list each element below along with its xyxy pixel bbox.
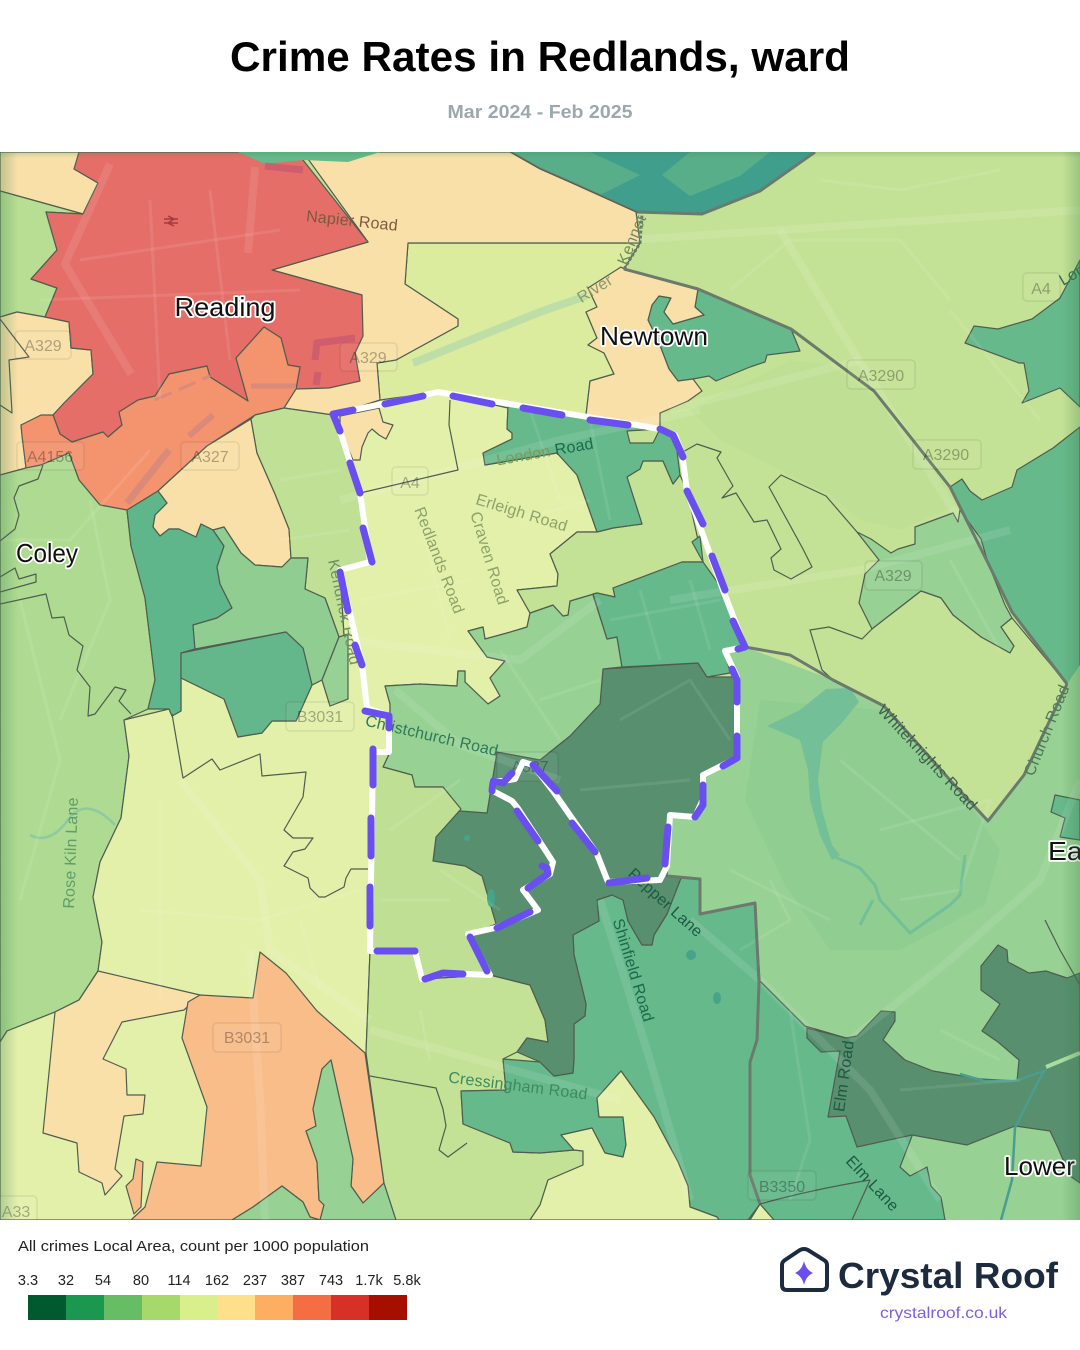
region: east of ward green block	[593, 562, 745, 677]
road number badges: A4	[1031, 281, 1051, 298]
lake in whiteknights park	[767, 688, 859, 860]
thick boundary lines	[624, 215, 1067, 1220]
road name labels: Elm Road	[831, 1039, 858, 1113]
road number badges	[0, 273, 1060, 1225]
region: green block B3031	[181, 632, 312, 737]
legend values: 3.3	[18, 1273, 38, 1289]
river thames area	[510, 152, 815, 214]
place names: Coley	[16, 538, 78, 568]
region: lower left cream	[43, 971, 200, 1195]
region: green triangle	[692, 536, 703, 562]
road name labels: Cressingham Road	[447, 1070, 589, 1103]
roads	[0, 164, 1080, 1220]
rail station symbol	[164, 216, 178, 226]
subtitle: date range: Mar 2024 - Feb 2025	[448, 102, 632, 122]
road name labels: Redlands Road	[410, 505, 467, 616]
region: mid green strip by Kendrick Road	[322, 634, 348, 706]
region: redlands yellow green band	[517, 461, 703, 616]
region: city centre red	[31, 152, 368, 442]
road name labels: Craven Road	[466, 510, 511, 607]
road name labels: Kennet	[615, 213, 650, 267]
edge vignette	[0, 152, 1080, 1220]
river bank strip above the red area	[238, 152, 380, 164]
region boundary lines	[0, 319, 1080, 1157]
region: south yellow	[530, 1071, 719, 1220]
road number badges: A3290	[923, 447, 969, 464]
region: cream A327	[153, 419, 291, 567]
road name labels: Whiteknights Road	[874, 702, 980, 814]
legend values: 237	[243, 1273, 267, 1289]
region: salmon ward	[21, 327, 300, 510]
region: orange B3031	[131, 952, 384, 1220]
place names	[16, 292, 1080, 1181]
road number badges: A3290	[858, 368, 904, 385]
region: newtown cream	[586, 267, 704, 429]
region: mid green west	[193, 527, 339, 685]
road number badges: B3350	[759, 1179, 805, 1196]
region: north east corner green	[965, 260, 1080, 407]
legend title: All crimes Local Area, count per 1000 population	[18, 1238, 369, 1255]
region: london road green	[483, 405, 680, 532]
title: Crime Rates in Redlands, ward	[230, 33, 850, 80]
region: church road light green	[810, 591, 1067, 821]
region: redlands mid green	[383, 593, 622, 813]
river kennet tint	[413, 296, 586, 363]
place names: Reading	[174, 292, 276, 322]
region: far east green patch	[1051, 795, 1080, 840]
region: central north yellow	[377, 243, 640, 415]
region: small yellow south	[750, 1204, 774, 1220]
region: dark green university	[433, 663, 737, 1076]
logo: Crystal Roof	[780, 1247, 1059, 1322]
road name labels	[61, 208, 1080, 1215]
road number badges: A327	[511, 759, 549, 776]
road name labels: Pepper Lane	[624, 865, 706, 941]
road number badges: A329	[874, 568, 912, 585]
region: mid green mound south	[232, 1186, 320, 1220]
region: redlands south west green	[370, 752, 496, 979]
region: eastern green wedge	[950, 427, 1080, 684]
region: small orange sliver	[126, 1159, 143, 1214]
legend	[18, 1238, 421, 1320]
region: A329 mid green	[857, 510, 1014, 653]
legend values	[18, 1273, 421, 1289]
region: cream north of centre	[272, 152, 640, 415]
region: left cream A329	[0, 312, 93, 475]
region: green strip west of redlands	[251, 408, 372, 706]
road number badges: A329	[349, 350, 387, 367]
road name labels: River	[575, 272, 616, 307]
region: south of ward light green	[366, 951, 583, 1220]
park tint	[690, 360, 958, 530]
darker railway and car park tints in red	[265, 166, 355, 385]
region: cream notch in ward	[340, 408, 393, 460]
region: shinfield green	[461, 878, 945, 1220]
wordmark: Crystal Roof	[838, 1255, 1059, 1296]
road name labels: London Road	[495, 436, 595, 469]
road name labels: Church Road	[1021, 683, 1073, 778]
region: south east mid green	[667, 647, 1080, 1220]
road name labels: Napier Road	[305, 208, 399, 235]
place names: Newtown	[600, 321, 708, 351]
redlands ward outline	[333, 392, 745, 979]
road name labels: Rose Kiln Lane	[61, 797, 82, 909]
region: lower left yellow	[0, 392, 597, 1220]
legend values: 162	[205, 1273, 229, 1289]
legend values: 80	[133, 1273, 149, 1289]
legend values: 114	[167, 1273, 191, 1289]
region: lower earley dark green	[807, 945, 1080, 1183]
water ponds	[464, 835, 721, 1004]
whiteknights park tint	[745, 700, 1000, 950]
road name labels: Christchurch Road	[364, 713, 500, 760]
legend values: 5.8k	[393, 1273, 421, 1289]
road name labels: Erleigh Road	[474, 491, 569, 535]
region: teal strip	[127, 491, 232, 716]
map: crime rate choropleth	[0, 152, 1080, 1220]
road number badges: B3031	[297, 709, 343, 726]
road number badges: A327	[191, 449, 229, 466]
streams	[30, 809, 1080, 1220]
region: light yellow pocket above london road	[627, 429, 660, 443]
legend values: 743	[319, 1273, 343, 1289]
road name labels: Shinfield Road	[609, 917, 656, 1024]
place names: Lower	[1004, 1151, 1075, 1181]
website url: crystalroof.co.uk	[880, 1305, 1008, 1322]
road name labels: Elm Lane	[842, 1153, 902, 1215]
region: newtown north green	[648, 289, 800, 381]
region: top left cream	[0, 152, 98, 214]
base land colour	[0, 152, 1080, 1220]
legend values: 1.7k	[355, 1273, 383, 1289]
road name labels: Kendrick Road	[324, 558, 363, 667]
road number badges: A329	[24, 338, 62, 355]
road number badges: A4156	[27, 449, 73, 466]
legend colour scale	[28, 1295, 407, 1320]
road number badges: A4	[400, 475, 420, 492]
region: mid green wedge south	[306, 1060, 396, 1220]
legend values: 387	[281, 1273, 305, 1289]
icon: house with star	[782, 1249, 827, 1290]
railway tints in salmon	[127, 376, 296, 503]
legend values: 54	[95, 1273, 111, 1289]
region: coley west green	[0, 453, 155, 1042]
legend values: 32	[58, 1273, 74, 1289]
region: upper left green	[0, 191, 83, 317]
road number badges: B3031	[224, 1030, 270, 1047]
